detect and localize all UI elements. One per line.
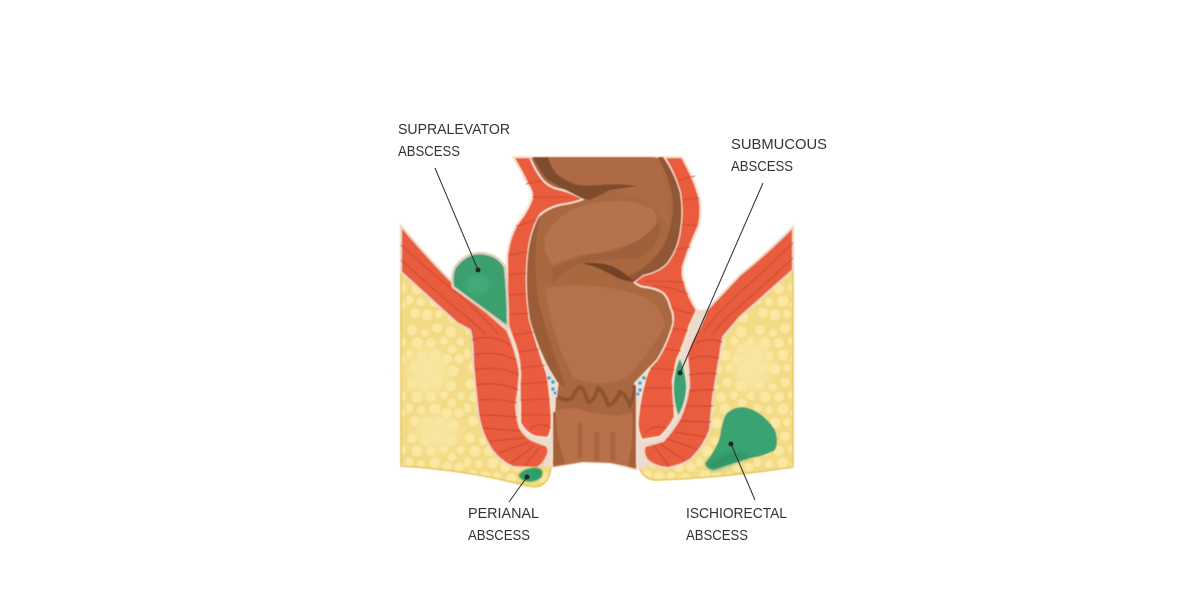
label: ischiorectal abscess: ABSCESS [686,527,748,544]
leader line: supralevator [435,168,480,272]
upper lobe [548,157,669,225]
pectinate line [556,385,636,416]
lower lobe highlight [545,285,665,383]
dark lower fold [582,263,634,282]
connective tissue: right [635,267,708,470]
rectum and anal canal lumen [527,157,682,470]
left edge shade [527,215,566,388]
label: supralevator abscess [398,121,510,160]
right dark rim [628,157,682,282]
label: ischiorectal abscess [686,505,787,544]
leader line: submucous [678,183,763,376]
label: ischiorectal abscess: ISCHIORECTAL [686,505,787,522]
leader line: ischiorectal [728,442,755,500]
rectal wall and internal sphincter: right [634,157,701,440]
label: perianal abscess: PERIANAL [468,505,539,522]
ischiorectal abscess [705,407,777,470]
perianal glands right [636,374,647,398]
submucous abscess [673,357,687,417]
middle fold lobes [545,201,656,265]
rectal wall and internal sphincter: left [507,157,584,438]
label: submucous abscess: SUBMUCOUS [731,136,827,153]
levator and external sphincter muscle: left [401,226,548,468]
right fat tissue [637,268,793,480]
dark top fold [533,157,638,200]
levator and external sphincter muscle: right [644,227,793,468]
connective tissue: left [505,325,558,466]
left fat tissue [401,270,552,487]
label: supralevator abscess: ABSCESS [398,143,460,160]
perianal glands left [547,373,558,398]
supralevator abscess [452,253,508,327]
label: submucous abscess [731,136,827,175]
label: supralevator abscess: SUPRALEVATOR [398,121,510,138]
perianal abscess [518,467,543,482]
label: perianal abscess: ABSCESS [468,527,530,544]
leader line: perianal [509,474,530,502]
label: perianal abscess [468,505,539,544]
label: submucous abscess: ABSCESS [731,158,793,175]
anal canal [553,385,636,468]
